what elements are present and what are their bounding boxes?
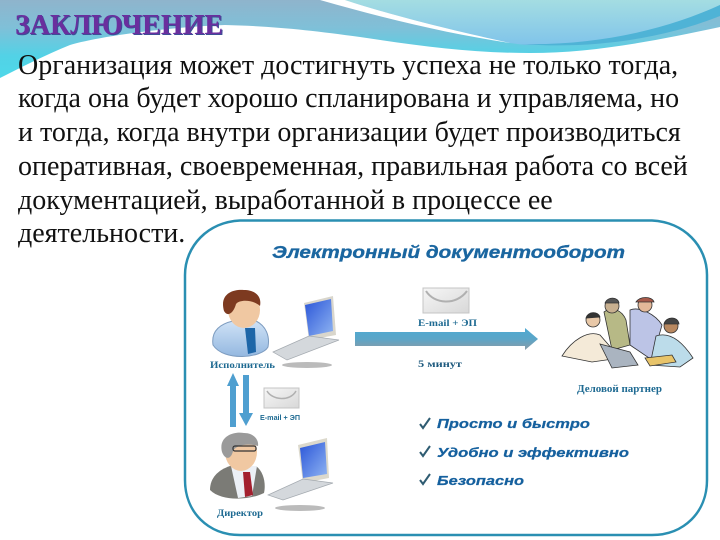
icon: business partners group xyxy=(562,298,693,368)
label: executor: Исполнитель xyxy=(210,360,275,370)
label: business partner: Деловой партнер xyxy=(577,384,662,395)
body text: оперативная, своевременная, правильная работа со всей xyxy=(18,151,688,182)
header background waves xyxy=(0,0,720,78)
body text xyxy=(18,50,688,249)
item: safe xyxy=(420,473,524,488)
item: safe: Безопасно xyxy=(437,473,524,488)
panel frame xyxy=(185,220,707,535)
label: director: Директор xyxy=(217,508,263,518)
body text: документацией, выработанной в процессе ее xyxy=(18,184,553,216)
icon: envelope lower xyxy=(264,388,299,408)
item: convenient and effective: Удобно и эффективно xyxy=(437,445,629,460)
title: ЗАКЛЮЧЕНИЕ xyxy=(15,10,223,41)
figure heading: Электронный документооборот xyxy=(272,242,625,262)
item: simple and fast: Просто и быстро xyxy=(437,416,590,431)
label: five minutes: 5 минут xyxy=(418,359,463,369)
arrow: horizontal to partner xyxy=(355,328,538,350)
icon: executor laptop xyxy=(273,296,339,368)
label: email and signature lower: E-mail + ЭП xyxy=(260,415,300,422)
icon: director laptop xyxy=(268,438,333,511)
label: email and signature top: E-mail + ЭП xyxy=(418,318,477,328)
icon: director person xyxy=(210,433,265,499)
body text: деятельности. xyxy=(18,218,185,249)
body text: Организация может достигнуть успеха не только тогда, xyxy=(18,50,678,81)
body text: когда она будет хорошо спланирована и управляема, но xyxy=(18,83,679,114)
checklist xyxy=(420,416,629,488)
icon: executor person xyxy=(213,290,268,357)
arrow: up and down between executor and director xyxy=(227,373,253,427)
icon: envelope top xyxy=(423,288,469,313)
body text: и тогда, когда внутри организации будет производиться xyxy=(18,117,681,148)
